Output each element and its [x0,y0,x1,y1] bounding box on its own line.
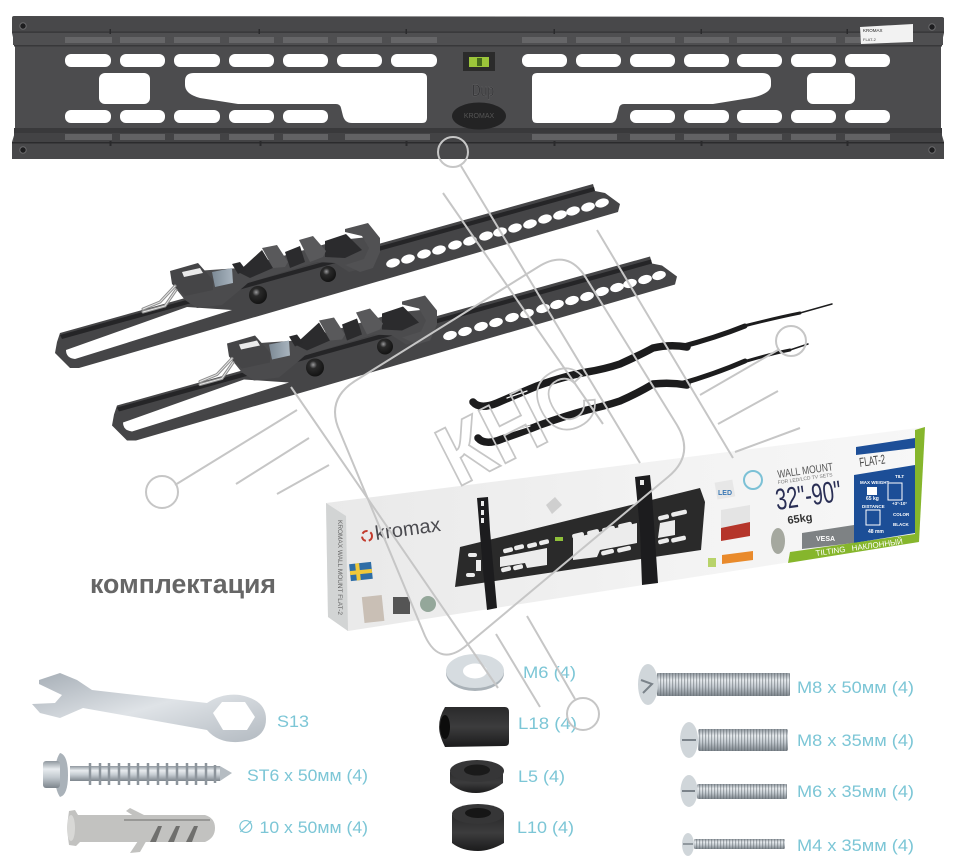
Dup text: Dup [472,81,494,100]
wall anchor [67,808,215,853]
blue spec panel: MAX WEIGHT [860,480,889,485]
label: M6x35: M6 x 35мм (4) [797,782,914,801]
watermark lines [175,166,800,707]
watermark circles [146,137,806,730]
left arm rail 2 [112,256,677,440]
blue spec panel: BLACK [893,522,909,527]
label: L5: L5 (4) [518,767,565,786]
orange badge [722,551,753,564]
lower strap [478,344,808,442]
sticker: KROMAX [863,28,883,33]
watermark frame [335,260,684,655]
tilt icon [546,497,562,514]
blue spec panel: 48 mm [868,529,884,535]
blue spec panel: TILT [895,474,904,479]
qr code [393,597,410,614]
gray vesa panel: VESA [816,536,835,543]
wrench [32,673,266,742]
blue spec panel: 65 kg [866,496,879,502]
blue spec panel: COLOR [893,512,910,517]
size range: 32"-90" [773,475,843,517]
label: L10: L10 (4) [517,818,574,837]
box front face [326,427,925,631]
label: M4x35: M4 x 35мм (4) [797,836,914,855]
top row slots [65,54,890,67]
level on mount [555,537,563,541]
bottom row slots [65,110,890,123]
rib ticks [110,29,848,146]
led badge: LED [718,490,732,497]
swedish flag [349,562,373,581]
bolt M6x35 [680,775,787,807]
kromax logo: kromax [374,514,442,545]
naklonny label: НАКЛОННЫЙ [851,537,904,553]
spacer L18 [439,707,509,747]
upper strap [473,304,832,406]
safety straps [473,304,832,442]
box side panel [326,503,348,631]
label: ST6: ST6 x 50мм (4) [247,766,368,785]
slot [66,307,232,359]
bolt M8x50 [638,664,790,705]
bottom flange [14,128,942,133]
spirit level [463,52,495,71]
channel [238,234,362,278]
top blue strip [856,438,915,455]
large cut-outs [99,73,855,123]
bolts [249,286,267,304]
installation thumbnail [721,505,750,541]
poster [362,595,384,623]
tilting label: TILTING [815,545,846,558]
label: M8x50: M8 x 50мм (4) [797,678,914,697]
corner screw holes [20,23,935,153]
blue spec panel [854,465,915,543]
side text: KROMAX WALL MOUNT FLAT-2 [336,520,343,615]
washer [446,654,504,691]
blue spec panel: +3°-10° [892,501,907,506]
pictured mount cut-outs [466,480,687,577]
oval badge: KROMAX [464,113,494,120]
spacer L5 [450,760,504,793]
wood screw [43,753,232,797]
holes [385,197,610,269]
wall plate [12,16,944,159]
label: L18: L18 (4) [518,714,577,733]
colour ring [744,471,762,489]
label: M8x35: M8 x 35мм (4) [797,731,914,750]
pictured mount [455,475,705,610]
max weight: 65kg [787,512,813,527]
label: M6: M6 (4) [523,663,576,682]
blue part [212,268,233,287]
blue spec panel: DISTANCE [862,504,885,509]
spacer L10 [452,804,504,851]
watermark [146,137,806,730]
left arm rail 1 [55,184,620,368]
wall mount heading: WALL MOUNT [777,461,834,481]
top flange [12,16,944,33]
green band [788,534,919,563]
product box [326,427,925,631]
knob [232,262,246,274]
oval badge [452,102,506,130]
clip box [170,263,213,296]
bridges [262,245,288,268]
label: anchor size: ∅ 10 x 50мм (4) [237,818,368,837]
ghost slots [65,37,890,43]
green side panel [915,427,925,542]
gray vesa panel [802,525,854,549]
sub heading: FOR LED/LCD TV SETS [777,472,834,486]
bolt M4x35 [682,833,785,856]
model name: FLAT-2 [858,451,886,470]
green mini badge [708,558,716,567]
bolt M8x35 [680,722,788,758]
round badge [420,596,436,612]
watermark letters: КНС [422,344,613,505]
label: S13: S13 [277,712,309,731]
person thumbnail [771,528,785,554]
bracket body [171,236,380,308]
carabiner [143,286,176,312]
rail plate [55,184,620,368]
plate body [12,18,944,159]
sticker [860,24,913,44]
sticker: FLAT-2 [863,37,877,42]
heading: komplektatsiya: комплектация [90,569,276,599]
led badge [715,480,735,499]
